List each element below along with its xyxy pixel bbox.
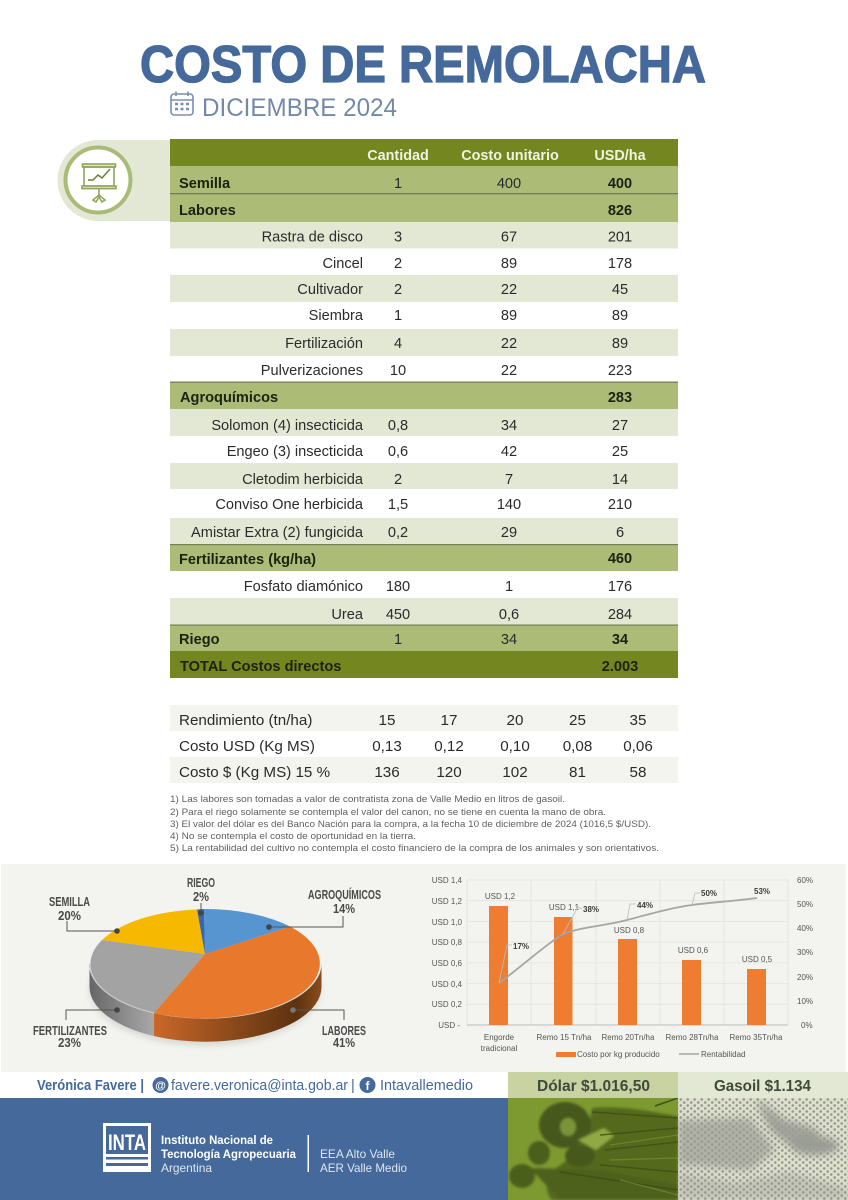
row: Fertilizantes: 460 (608, 551, 632, 567)
row: Solomon: Solomon (4) insecticida (211, 418, 364, 434)
label: riego: RIEGO (187, 875, 215, 890)
row: Pulverizaciones: Pulverizaciones (261, 363, 363, 379)
slice: labores (154, 926, 320, 1018)
row: Semilla: 400 (608, 176, 632, 192)
row: Costo pesos: 120 (436, 764, 462, 781)
bar value labels (485, 892, 773, 964)
icon: at sign: @ (155, 1080, 166, 1092)
row: Costo USD: Costo USD (Kg MS) (179, 738, 315, 755)
row: Pulverizaciones: 22 (501, 363, 517, 379)
row: Fertilización: Fertilización (285, 336, 363, 352)
row: Semilla: 1 (394, 176, 402, 192)
category labels: Remo 20Tn/ha (602, 1033, 655, 1042)
logo: INTA: INTA (108, 1130, 146, 1155)
row: Fertilización: 22 (501, 336, 517, 352)
institution name (161, 1133, 296, 1175)
category labels: Remo 28Tn/ha (666, 1033, 719, 1042)
dollar price box: Dólar $1.016,50 (537, 1078, 650, 1095)
row: Fosfato: 180 (386, 579, 410, 595)
slice: fertilizantes (90, 940, 205, 1013)
subtitle: date: DICIEMBRE 2024 (202, 94, 397, 122)
row: Cletodim: 14 (612, 472, 628, 488)
row: Cultivador: 45 (612, 282, 628, 298)
left axis (432, 876, 463, 1030)
row: Labores: 826 (608, 203, 632, 219)
footnotes (170, 794, 659, 853)
bar value labels: USD 1,2 (485, 892, 516, 901)
left axis: USD 1,4 (432, 876, 463, 885)
label: fertilizantes: FERTILIZANTES (33, 1023, 107, 1038)
row: Semilla (170, 166, 678, 194)
row: Engeo (227, 444, 628, 460)
bar value labels: USD 0,5 (742, 955, 773, 964)
row: Semilla: Semilla (179, 176, 231, 192)
row: Costo USD: 0,12 (434, 738, 464, 755)
photo: beets green tint (508, 1098, 678, 1200)
row: Solomon: 27 (612, 418, 628, 434)
row: Costo pesos (170, 757, 678, 783)
row: Cincel: 178 (608, 256, 632, 272)
left axis: USD - (438, 1021, 460, 1030)
chart: cost per kg bars and profitability line (432, 876, 813, 1059)
row: Costo pesos: Costo $ (Kg MS) 15 % (179, 764, 330, 781)
row: Costo USD: 0,06 (623, 738, 653, 755)
right axis: 20% (797, 973, 813, 982)
contact strip: Verónica Favere | (37, 1078, 144, 1094)
label: riego: 2% (193, 889, 209, 904)
label: agroquímicos (266, 887, 381, 930)
row: Riego: Riego (179, 632, 220, 648)
institution name: Instituto Nacional de (161, 1133, 273, 1147)
profitability labels: 38% (583, 905, 599, 914)
row: Semilla: 400 (497, 176, 521, 192)
row: Cultivador: Cultivador (297, 282, 363, 298)
right axis: 30% (797, 948, 813, 957)
row: Rendimiento: 20 (507, 712, 523, 729)
row: Costo USD: 0,10 (500, 738, 530, 755)
row: Solomon: 0,8 (388, 418, 408, 434)
title: COSTO DE REMOLACHA (140, 36, 706, 94)
footnotes: 5) La rentabilidad del cultivo no contempla el costo financiero de la compra de los animales y son orientativos. (170, 843, 659, 853)
panel: yield table (170, 705, 678, 783)
row: Cincel (322, 256, 632, 272)
institution name: Tecnología Agropecuaria (161, 1147, 296, 1161)
row: Fertilización: 89 (612, 336, 628, 352)
row: Siembra: 89 (501, 308, 517, 324)
label: agroquímicos: AGROQUÍMICOS (308, 887, 381, 902)
row: Solomon (170, 409, 678, 436)
right axis: 0% (801, 1021, 813, 1030)
row: Riego: 34 (612, 632, 629, 648)
station names: EEA Alto Valle (320, 1147, 395, 1161)
footnotes: 2) Para el riego solamente se contempla el valor del canon, no se tiene en cuenta la mano de obra. (170, 807, 606, 817)
profitability labels: 50% (701, 889, 717, 898)
row: Conviso: Conviso One herbicida (215, 497, 364, 513)
row: Rendimiento: 15 (379, 712, 395, 729)
category labels: Remo 35Tn/ha (730, 1033, 783, 1042)
row: Rastra de disco: Rastra de disco (262, 230, 363, 246)
label: semilla: SEMILLA (49, 894, 90, 909)
row: Costo pesos: 81 (569, 764, 586, 781)
label: riego (187, 875, 215, 916)
right axis: 10% (797, 997, 813, 1006)
label: semilla (49, 894, 120, 934)
icon: facebook: f (366, 1079, 370, 1093)
panel: cost table (170, 139, 678, 678)
category labels: tradicional (481, 1044, 517, 1053)
icon: calendar (171, 92, 193, 115)
left axis: USD 1,2 (432, 897, 463, 906)
row: Fertilización (170, 329, 678, 356)
row: Fosfato: 1 (505, 579, 513, 595)
row: Rastra de disco: 3 (394, 230, 402, 246)
row: Cletodim (170, 463, 678, 489)
right axis (797, 876, 813, 1030)
legend (556, 1050, 745, 1059)
row: Costo USD: 0,08 (563, 738, 592, 755)
contact strip: Intavallemedio (380, 1078, 473, 1094)
row: Conviso (215, 497, 632, 513)
diesel price box: Gasoil $1.134 (714, 1078, 811, 1095)
row: Rendimiento: 35 (630, 712, 646, 729)
profitability labels: 17% (513, 942, 529, 951)
row: Labores: Labores (179, 203, 236, 219)
row: Pulverizaciones (261, 363, 632, 379)
left axis: USD 0,8 (432, 938, 463, 947)
row: Cultivador (170, 275, 678, 302)
row: Engeo: Engeo (3) insecticida (227, 444, 364, 460)
row: Costo pesos: 136 (374, 764, 400, 781)
label: agroquímicos: 14% (333, 901, 355, 916)
row: Conviso: 210 (608, 497, 632, 513)
station names (320, 1147, 407, 1175)
row: Urea: 0,6 (499, 607, 519, 623)
row: Total: TOTAL Costos directos (180, 659, 341, 675)
row: Urea: 450 (386, 607, 410, 623)
icon: at sign (152, 1077, 168, 1093)
icon: facebook (360, 1077, 376, 1093)
row: Labores (170, 193, 678, 222)
row: Siembra: Siembra (309, 308, 364, 324)
label: labores: 41% (333, 1035, 355, 1050)
slice: agroquímicos (204, 909, 290, 954)
left axis: USD 0,2 (432, 1000, 463, 1009)
row: Cultivador: 2 (394, 282, 402, 298)
profitability labels (513, 887, 770, 951)
row: Costo USD (179, 738, 653, 755)
row: Amistar: 6 (616, 525, 624, 541)
left axis: USD 0,6 (432, 959, 463, 968)
icon: presentation board badge (58, 140, 170, 221)
category labels: Remo 15 Tn/ha (536, 1033, 592, 1042)
row: Urea: Urea (331, 607, 364, 623)
row: Amistar: 0,2 (388, 525, 408, 541)
label: labores (290, 1007, 366, 1050)
row: Rendimiento (170, 705, 678, 731)
row: Fosfato: 176 (608, 579, 632, 595)
row: Cletodim: 7 (505, 472, 513, 488)
row: Engeo: 42 (501, 444, 517, 460)
footnotes: 3) El valor del dólar es del Banco Nación para la compra, a la fecha 10 de diciembre de 2024 (1016,5 $/USD). (170, 819, 651, 829)
row: Costo pesos: 102 (502, 764, 528, 781)
row: Rendimiento: 25 (569, 712, 586, 729)
row: Siembra (309, 308, 628, 324)
bar value labels: USD 1,1 (549, 903, 580, 912)
label: semilla: 20% (58, 908, 81, 923)
row: Costo USD: 0,13 (372, 738, 402, 755)
leader lines (499, 893, 700, 983)
label: labores: LABORES (322, 1023, 366, 1038)
row: Amistar (170, 518, 678, 544)
row: Fertilizantes (170, 544, 678, 571)
footer: institution band (0, 1098, 508, 1200)
row: Riego: 34 (501, 632, 517, 648)
panel: charts background (1, 864, 846, 1072)
row: Engeo: 0,6 (388, 444, 408, 460)
row: Rastra de disco: 67 (501, 230, 517, 246)
contact strip (0, 1072, 508, 1098)
right axis: 60% (797, 876, 813, 885)
category labels: Engorde (484, 1033, 515, 1042)
profitability line (499, 898, 757, 983)
right axis: 40% (797, 924, 813, 933)
bars (489, 906, 766, 1025)
row: Solomon: 34 (501, 418, 517, 434)
row: Conviso: 1,5 (388, 497, 408, 513)
contact strip: | (351, 1078, 355, 1094)
row: Pulverizaciones: 10 (390, 363, 406, 379)
row: Urea (170, 598, 678, 625)
row: Siembra: 1 (394, 308, 402, 324)
dollar price box (508, 1072, 678, 1098)
row: Amistar: Amistar Extra (2) fungicida (191, 525, 364, 541)
bar value labels: USD 0,8 (614, 926, 645, 935)
row: Cincel: 2 (394, 256, 402, 272)
row: Costo pesos: 58 (630, 764, 646, 781)
category labels (481, 1033, 783, 1053)
profitability labels: 53% (754, 887, 770, 896)
diesel price box (678, 1072, 848, 1098)
left axis: USD 0,4 (432, 980, 463, 989)
row: Fosfato: Fosfato diamónico (244, 579, 363, 595)
contact strip: favere.veronica@inta.gob.ar (171, 1078, 348, 1094)
legend: Rentabilidad (701, 1050, 745, 1059)
label: fertilizantes: 23% (58, 1035, 81, 1050)
table header: Cantidad (367, 148, 429, 164)
photo: beets halftone (678, 1098, 848, 1200)
row: Cletodim: Cletodim herbicida (242, 472, 364, 488)
row: Engeo: 25 (612, 444, 628, 460)
row: Cletodim: 2 (394, 472, 402, 488)
left axis: USD 1,0 (432, 918, 463, 927)
row: Rastra de disco (170, 222, 678, 248)
row: Agroquímicos (170, 382, 678, 409)
legend: Costo por kg producido (577, 1050, 660, 1059)
row: Cincel: 89 (501, 256, 517, 272)
footnotes: 1) Las labores son tomadas a valor de contratista zona de Valle Medio en litros de gasoil. (170, 794, 565, 804)
row: Rastra de disco: 201 (608, 230, 632, 246)
row: Riego: 1 (394, 632, 402, 648)
institution name: Argentina (161, 1161, 212, 1175)
row: Rendimiento: Rendimiento (tn/ha) (179, 712, 312, 729)
table header (170, 139, 678, 166)
row: Conviso: 140 (497, 497, 521, 513)
row: Siembra: 89 (612, 308, 628, 324)
row: Agroquímicos: 283 (608, 390, 632, 406)
row: Agroquímicos: Agroquímicos (180, 390, 278, 406)
label: fertilizantes (33, 1007, 120, 1050)
row: Amistar: 29 (501, 525, 517, 541)
logo: INTA (103, 1123, 151, 1172)
right axis: 50% (797, 900, 813, 909)
row: Fosfato (244, 579, 632, 595)
table header: USD/ha (594, 148, 647, 164)
row: Pulverizaciones: 223 (608, 363, 632, 379)
row: Cincel: Cincel (322, 256, 363, 272)
slice: semilla (102, 910, 205, 954)
row: Total: 2.003 (602, 659, 638, 675)
row: Urea: 284 (608, 607, 632, 623)
row: Cultivador: 22 (501, 282, 517, 298)
slice: riego (197, 909, 205, 954)
footnotes: 4) No se contempla el costo de oportunidad en la tierra. (170, 831, 416, 841)
profitability labels: 44% (637, 901, 653, 910)
table header: Costo unitario (461, 148, 559, 164)
bar value labels: USD 0,6 (678, 946, 709, 955)
station names: AER Valle Medio (320, 1161, 407, 1175)
row: Fertilizantes: Fertilizantes (kg/ha) (179, 552, 316, 568)
row: Rendimiento: 17 (441, 712, 457, 729)
chart: 3D pie of cost shares (33, 875, 381, 1050)
row: Total (170, 651, 678, 678)
row: Riego (170, 624, 678, 652)
row: Fertilización: 4 (394, 336, 402, 352)
